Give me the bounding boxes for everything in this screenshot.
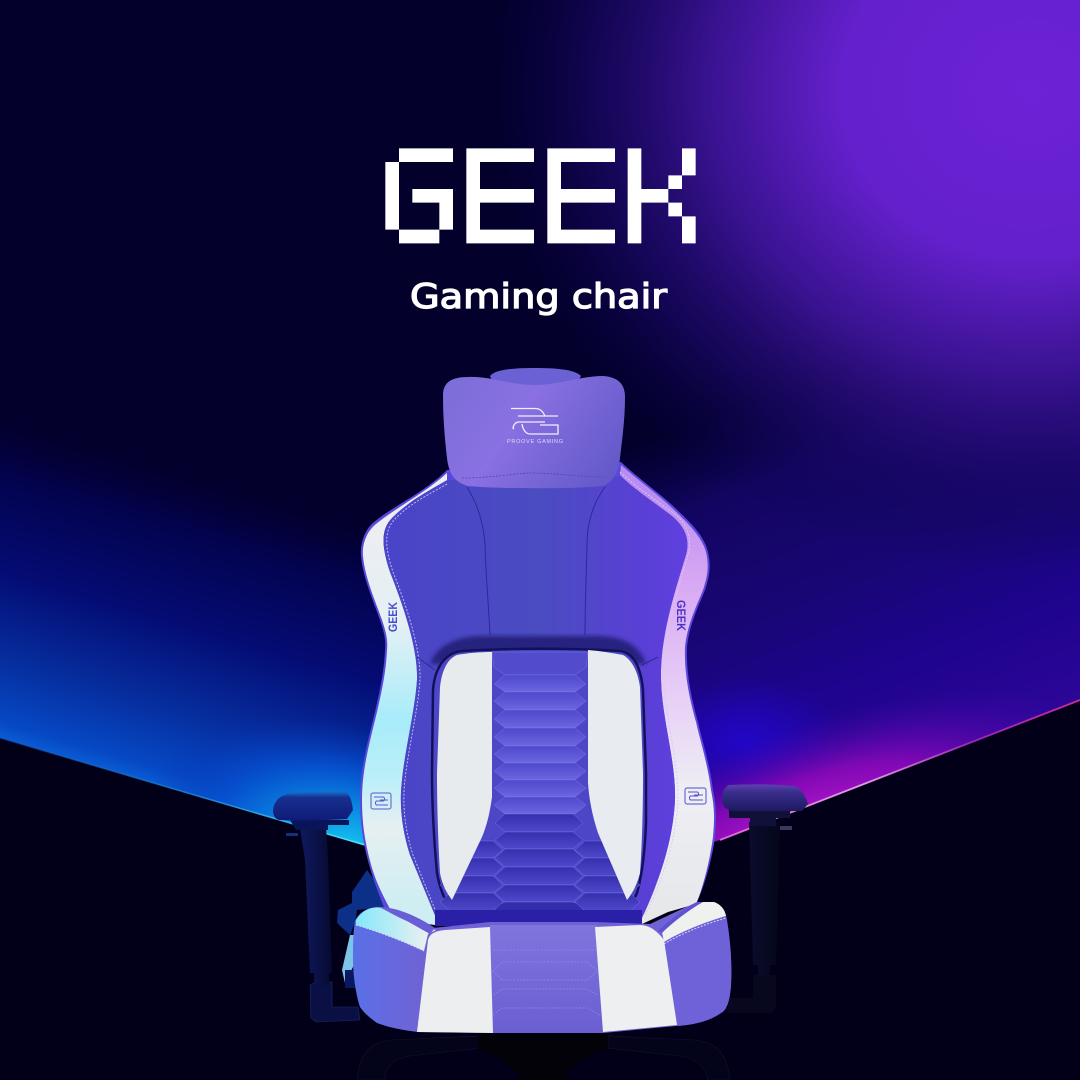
side text left: GEEK: [386, 602, 400, 632]
lumbar cushion: [430, 636, 646, 911]
left wing stitching: [356, 925, 424, 951]
seat centre panel: [490, 925, 603, 1033]
right arm clamp: [729, 810, 790, 826]
seat outer: [353, 902, 731, 1033]
left arm bracket: [310, 982, 360, 1022]
small logo right: [685, 788, 706, 804]
pillow body: [443, 376, 625, 488]
headrest pillow: [443, 368, 625, 488]
left white side band: [362, 473, 447, 925]
left arm stem: [300, 828, 332, 985]
pillow logo text: PROOVE GAMING: [507, 439, 563, 445]
right armrest: [722, 784, 808, 1013]
small logo left: [371, 793, 391, 809]
right arm bracket: [728, 975, 776, 1013]
right arm pad: [722, 784, 808, 811]
back centre panel: [384, 476, 687, 918]
left wing: [356, 908, 436, 951]
subtitle: Gaming chair: [410, 277, 667, 317]
letter E second: [547, 148, 615, 243]
left armrest: [273, 792, 360, 1022]
right white side band: [620, 465, 714, 924]
pillow logo mark: [511, 408, 558, 434]
seat base strip: [435, 910, 642, 926]
backrest shell: [360, 462, 716, 925]
seat quilting: [493, 950, 600, 1015]
right wing: [662, 902, 726, 942]
centre panel seams: [467, 487, 490, 635]
chair base: [357, 1032, 730, 1080]
cushion body: [432, 649, 646, 911]
gaming chair illustration: [273, 368, 808, 1080]
right seat white stripe: [595, 925, 677, 1032]
right arm stem: [749, 822, 780, 975]
left seat white stripe: [417, 927, 493, 1033]
right wing stitching: [664, 918, 726, 944]
background: night gradient sky: [0, 0, 1080, 844]
pillow seam: [462, 473, 605, 478]
letter G: [385, 148, 453, 243]
side stitching: [387, 484, 447, 912]
left white panel: [437, 652, 492, 900]
letter E: [466, 148, 534, 243]
lumbar recess shadow: [430, 636, 646, 664]
right white panel: [588, 650, 643, 900]
side text right: GEEK: [674, 600, 688, 631]
seat cushion: [353, 902, 731, 1033]
pillow top bump: [490, 368, 581, 387]
rear mechanism: [337, 870, 387, 988]
quilted hex centre: [440, 652, 640, 911]
title: GEEK pixel logo: [385, 148, 696, 243]
background: dark floor with light edges: [0, 700, 1080, 1080]
left arm clamp: [290, 820, 349, 830]
letter K: [628, 148, 696, 243]
left arm pad: [273, 792, 353, 820]
